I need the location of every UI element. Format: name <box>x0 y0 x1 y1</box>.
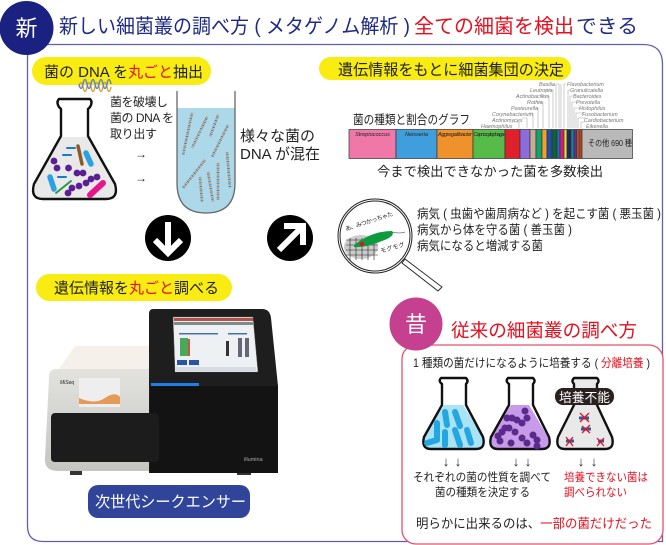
text: determine species by property <box>413 470 551 499</box>
text: only some bacteria could be identified: 明らかに出来るのは、一部の菌だけだった <box>416 516 652 531</box>
text: various DNA mixed: DNA が混在 <box>240 146 320 163</box>
image: next-generation sequencer machine: illumina <box>244 457 264 463</box>
badge: new: 新 <box>15 16 38 41</box>
heading: graph title: 菌の種類と割合のグラフ <box>353 113 470 127</box>
chart: bacterial proportions bar: Rothia <box>527 100 543 106</box>
heading: determine bacterial groups: 遺伝情報をもとに細菌集団の決定 <box>338 61 564 79</box>
badge: old <box>390 298 442 350</box>
chart: bacterial proportions bar: Leutropia <box>530 88 552 94</box>
chart: bacterial proportions bar: Bacteroides <box>573 94 602 100</box>
heading: conventional method: 従来の細菌叢の調べ方 <box>451 320 637 341</box>
badge: old: 昔 <box>405 312 427 337</box>
chart: bacterial proportions bar: Histophilus <box>579 106 606 112</box>
icon: magnifying glass with bacterium: モグモグ <box>379 240 406 255</box>
text: many undetected bacteria found: 今まで検出できなかった菌を多数検出 <box>377 164 603 179</box>
chart: bacterial proportions bar <box>349 82 632 158</box>
icon: test tube with DNA <box>177 91 235 213</box>
text: determine species by property: 菌の種類を決定する <box>435 485 530 499</box>
text: destroy bacteria and extract DNA: 菌を破壊し <box>110 94 168 109</box>
chart: bacterial proportions bar: Basilia <box>539 82 555 88</box>
chart: bacterial proportions bar: その他 690 種 <box>588 138 632 148</box>
text: various DNA mixed: 様々な菌の <box>240 128 315 145</box>
chart: bacterial proportions bar: Actinomyces <box>491 118 523 124</box>
text: disease-related bacteria list: 病気から体を守る菌 ( 善玉菌 ) <box>417 222 572 237</box>
label: next-generation sequencer: 次世代シークエンサー <box>95 493 246 511</box>
chart: bacterial proportions bar: Haemophilus <box>481 124 513 130</box>
chart: bacterial proportions bar: Prevotella <box>576 100 600 106</box>
arrows: down pairs: ↓ <box>513 454 519 469</box>
chart: bacterial proportions bar: Capnocytophaga <box>474 132 504 138</box>
title: 新しい細菌叢の調べ方 ( メタゲノム解析 ) <box>59 15 410 38</box>
heading: extract whole DNA: 菌の DNA を丸ごと抽出 <box>44 64 203 81</box>
icon: magnifying glass with bacterium: あ、みつかっちゃた <box>344 211 394 233</box>
heading: examine whole genes: 遺伝情報を丸ごと調べる <box>54 280 219 297</box>
icon: blue flask <box>423 378 484 449</box>
image: next-generation sequencer machine <box>45 309 278 475</box>
text: disease-related bacteria list <box>417 206 661 253</box>
text: destroy bacteria and extract DNA: 菌の DNA を <box>110 111 174 125</box>
chart: bacterial proportions bar: Flavobacterium <box>567 82 604 88</box>
chart: bacterial proportions bar: Eikenella <box>586 124 608 130</box>
image: next-generation sequencer machine: MiSeq <box>60 380 74 386</box>
panel: conventional method <box>402 345 663 544</box>
chart: bacterial proportions bar: Aggregatibacter <box>437 132 473 138</box>
chart: bacterial proportions bar: Corynebacterium <box>492 112 534 118</box>
chart: bacterial proportions bar: Actinobacillus <box>515 94 549 100</box>
text: unculturable bacteria cannot be studied: 調べられない <box>564 486 627 499</box>
title <box>59 15 638 38</box>
arrows: down pairs: ↓ <box>578 454 584 469</box>
text: various DNA mixed <box>240 128 320 163</box>
icon: magnifying glass with bacterium <box>338 199 442 291</box>
heading: determine bacterial groups <box>319 57 571 80</box>
chart: bacterial proportions bar: Streptococcus <box>355 132 390 138</box>
arrows: down pairs: ↓ <box>525 454 531 469</box>
arrows: down pairs <box>443 454 597 469</box>
heading: examine whole genes <box>36 274 232 301</box>
chart: bacterial proportions bar: Neisseria <box>405 132 428 138</box>
arrows: down pairs: ↓ <box>591 454 597 469</box>
icon: unculturable flask: 培養不能 <box>559 390 610 405</box>
icon: unculturable flask <box>555 378 614 449</box>
arrow: up-right <box>267 215 313 261</box>
text: culture intro: 1 種類の菌だけになるように培養する ( 分離培養 ) <box>413 356 650 370</box>
chart: bacterial proportions bar: Pasteurella <box>511 106 538 112</box>
icon: purple flask <box>490 378 550 450</box>
title: できる <box>576 16 638 38</box>
title: 全ての細菌を検出 <box>414 15 574 38</box>
badge: new <box>0 1 54 55</box>
text: destroy bacteria and extract DNA <box>110 94 174 185</box>
heading: extract whole DNA <box>32 57 211 92</box>
icon: flask with mixed bacteria <box>33 99 116 199</box>
text: determine species by property: それぞれの菌の性質を調べて <box>413 470 551 484</box>
text: unculturable bacteria cannot be studied <box>564 471 648 499</box>
arrows: down pairs: ↓ <box>443 454 449 469</box>
chart: bacterial proportions bar: Cardiobacterium <box>584 118 624 124</box>
label: next-generation sequencer <box>88 485 250 518</box>
text: destroy bacteria and extract DNA: 取り出す <box>110 127 157 141</box>
text: unculturable bacteria cannot be studied: 培養できない菌は <box>564 471 648 484</box>
text: disease-related bacteria list: 病気になると増減する菌 <box>417 238 543 253</box>
chart: bacterial proportions bar: Granulicatella <box>570 88 603 94</box>
arrow: down <box>145 215 191 261</box>
text: destroy bacteria and extract DNA: → <box>135 147 147 161</box>
text: destroy bacteria and extract DNA: → <box>135 171 147 185</box>
arrows: down pairs: ↓ <box>455 454 461 469</box>
chart: bacterial proportions bar: Fusobacterium <box>582 112 618 118</box>
